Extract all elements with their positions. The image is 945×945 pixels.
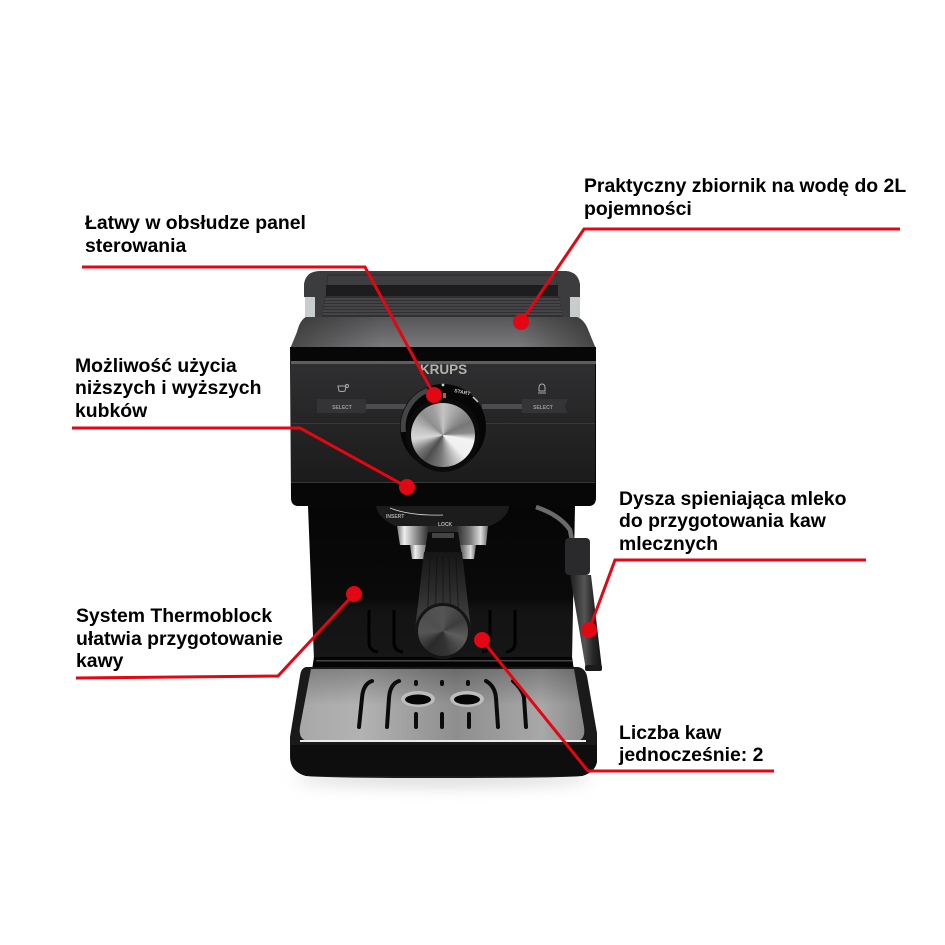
text: control panel: Łatwy w obsłudze panel (85, 212, 306, 234)
text: milk frother: Dysza spieniająca mleko (619, 488, 847, 510)
text: cups: niższych i wyższych (75, 377, 261, 399)
text: milk frother: mlecznych (619, 533, 718, 555)
brand logo: KRUPS (420, 362, 467, 377)
control dial: START (454, 388, 471, 397)
text: number of coffees: Liczba kaw (619, 722, 722, 744)
leader line: number of coffees (482, 640, 774, 771)
text: water tank: Praktyczny zbiornik na wodę do 2L (584, 175, 906, 197)
leader line: thermoblock (76, 594, 354, 678)
callout: thermoblock (76, 586, 362, 678)
leader line: control panel (82, 267, 434, 395)
group head: LOCK (438, 522, 453, 528)
marker dot: cups (399, 479, 415, 495)
left select button (317, 399, 367, 413)
text: milk frother: do przygotowania kaw (619, 510, 827, 532)
marker dot: milk frother (581, 622, 597, 638)
text: number of coffees: jednocześnie: 2 (618, 744, 763, 766)
callout: water tank (513, 175, 906, 330)
marker dot: thermoblock (346, 586, 362, 602)
callout: milk frother (581, 488, 866, 638)
callout: control panel (82, 212, 442, 403)
text: water tank: pojemności (584, 198, 692, 220)
machine head (290, 317, 596, 506)
marker dot: number of coffees (474, 632, 490, 648)
tray slots (359, 681, 526, 727)
leader line: milk frother (589, 560, 866, 630)
leader line: water tank (521, 229, 900, 322)
steam wand (536, 507, 602, 671)
marker dot: water tank (513, 314, 529, 330)
portafilter handle (415, 552, 471, 659)
icon: cup (338, 384, 349, 392)
back panel (308, 506, 575, 670)
text: control panel: sterowania (85, 235, 187, 257)
text: thermoblock: System Thermoblock (76, 605, 272, 627)
left select button: SELECT (332, 405, 352, 411)
text: thermoblock: kawy (76, 650, 124, 672)
espresso machine (290, 271, 602, 786)
leader line: cups (72, 428, 407, 487)
text: thermoblock: ułatwia przygotowanie (76, 628, 283, 650)
callout: cups (72, 355, 415, 495)
text: cups: Możliwość użycia (75, 355, 237, 377)
text: cups: kubków (75, 400, 148, 422)
icon: steam (538, 384, 546, 393)
group head: INSERT (386, 514, 404, 520)
water tank (304, 271, 580, 318)
portafilter cap (415, 603, 471, 659)
right select button (522, 399, 568, 413)
marker dot: control panel (426, 387, 442, 403)
callout: number of coffees (474, 632, 774, 771)
group head (376, 506, 509, 559)
drip tray (290, 667, 597, 778)
right select button: SELECT (533, 405, 553, 411)
tray holes (401, 691, 484, 707)
control dial (400, 384, 486, 472)
knob: brushed steel (411, 403, 475, 467)
